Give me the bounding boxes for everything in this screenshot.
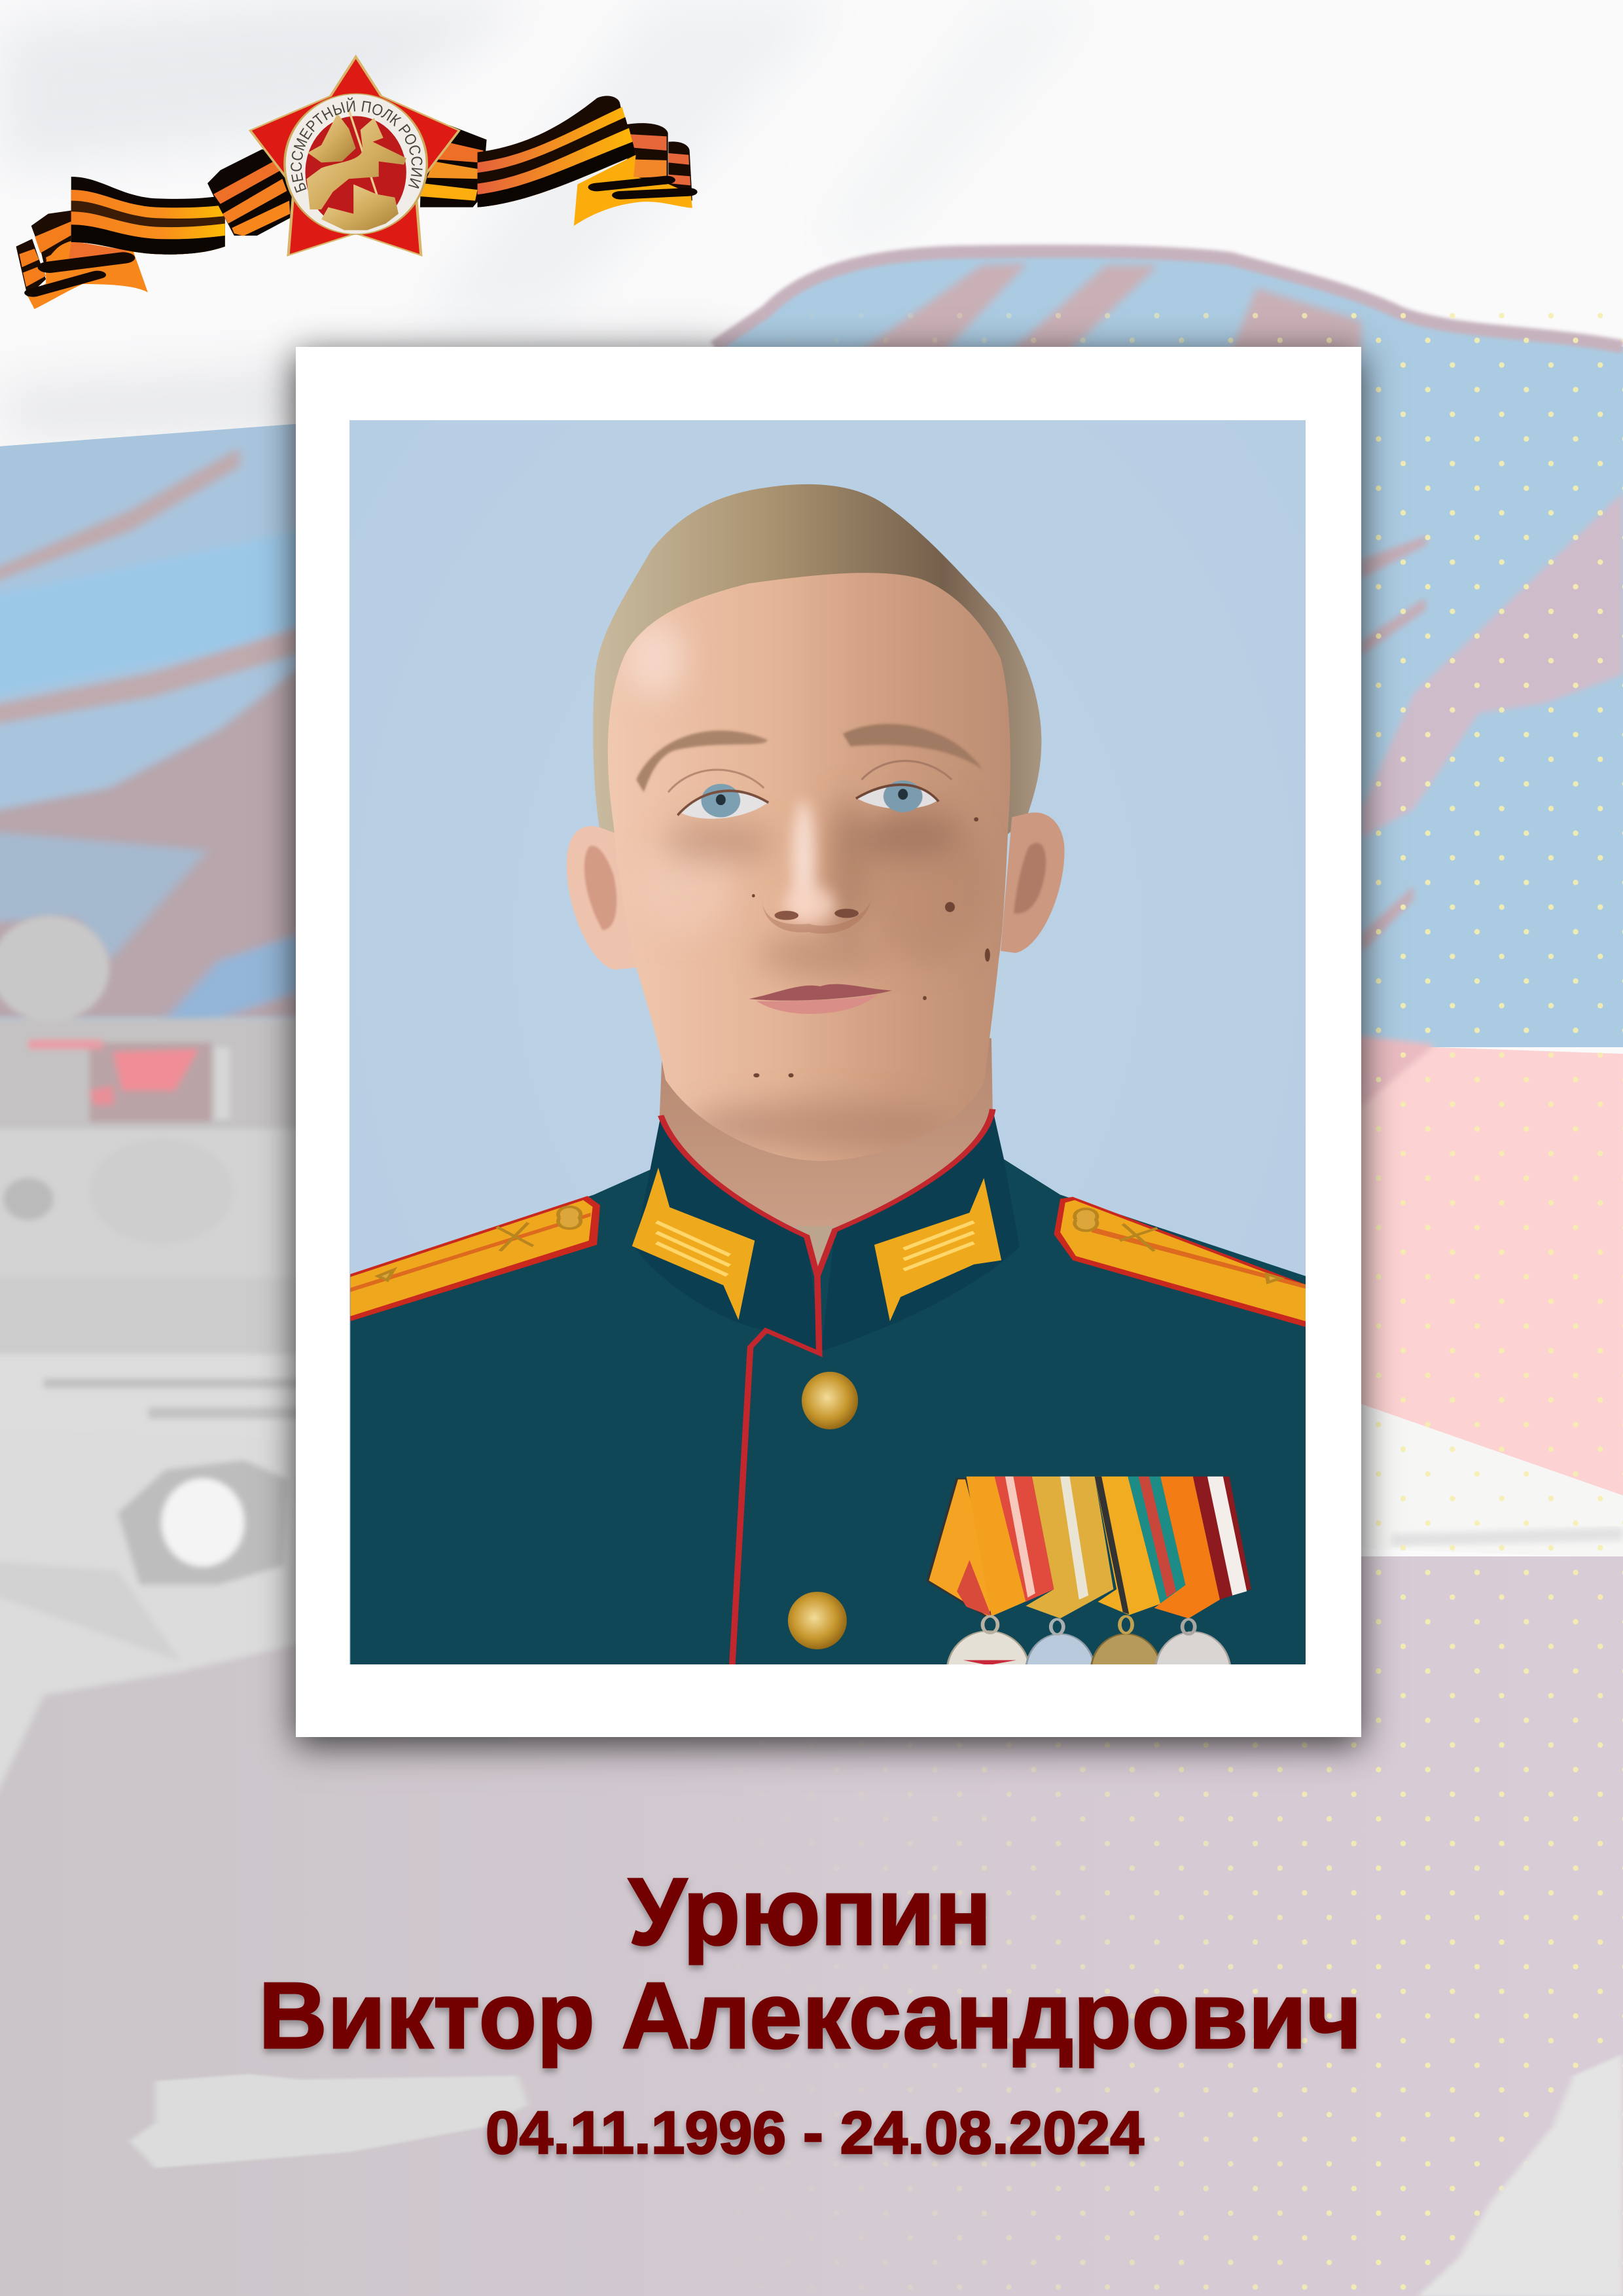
emblem: Immortal Regiment ribbon and star xyxy=(16,54,698,309)
nose xyxy=(762,901,871,934)
life dates: 04.11.1996 - 24.08.2024 xyxy=(486,2100,1144,2166)
face xyxy=(608,573,1010,1161)
turret dome xyxy=(0,916,109,1021)
right ribbon far folds xyxy=(597,123,692,201)
white patch lower right xyxy=(130,2054,1623,2296)
name and dates xyxy=(259,1858,1362,2166)
right collar tab xyxy=(874,1178,1001,1321)
white flag stripe folds xyxy=(0,0,1099,439)
right ribbon tail stripes xyxy=(597,180,688,195)
medal ribbons xyxy=(927,1477,1251,1619)
white flag stripe lower xyxy=(1348,1399,1623,1558)
left ribbon wave xyxy=(71,177,225,255)
headlamp xyxy=(162,1479,244,1567)
photo card frame xyxy=(296,347,1361,1737)
lips xyxy=(749,984,892,1014)
rider and cape xyxy=(308,113,356,162)
given name and patronymic: Виктор Александрович xyxy=(259,1963,1362,2068)
uniform and neck xyxy=(350,1038,1306,1712)
left collar tab xyxy=(632,1168,755,1320)
red flag stripe xyxy=(1348,1044,1623,1496)
right flag panel xyxy=(1348,492,1623,1558)
hair xyxy=(593,484,1041,834)
stone patch lower left xyxy=(130,2074,528,2168)
lower mauve field xyxy=(0,1556,1623,2296)
blue flag stripe, right xyxy=(714,251,1623,1047)
lower button xyxy=(788,1592,847,1649)
dragon xyxy=(321,185,399,230)
red star xyxy=(250,57,459,255)
polka dot overlay xyxy=(859,313,1623,2289)
moles xyxy=(752,817,990,1077)
neck xyxy=(660,1038,993,1227)
left eye xyxy=(668,770,768,819)
right ear xyxy=(1001,812,1065,953)
right ribbon tail xyxy=(574,155,692,226)
right epaulette xyxy=(1054,1197,1306,1327)
right ribbon rise xyxy=(478,96,636,207)
left eyebrow xyxy=(636,730,768,792)
portrait photo xyxy=(349,420,1306,1712)
red piping xyxy=(661,1109,993,1665)
medallion centre xyxy=(305,116,406,228)
upper button xyxy=(802,1372,858,1429)
horse body xyxy=(307,118,406,209)
tunic xyxy=(350,1109,1306,1665)
lance xyxy=(349,110,381,207)
facial shading xyxy=(625,621,990,1151)
collar xyxy=(635,1115,821,1352)
left flag and vehicle xyxy=(0,423,306,1806)
head xyxy=(567,484,1065,1161)
vehicle body xyxy=(0,916,306,1806)
left ribbon tail xyxy=(16,211,148,309)
medallion ring xyxy=(285,94,427,234)
left ear xyxy=(567,826,636,970)
right eyebrow xyxy=(843,724,982,769)
right ribbon near star xyxy=(420,126,487,207)
medallion inscription: БЕССМЕРТНЫЙ ПОЛК РОССИИ xyxy=(291,97,423,192)
medals xyxy=(947,1617,1230,1712)
surname: Урюпин xyxy=(628,1858,991,1965)
right eye xyxy=(856,761,952,812)
left epaulette xyxy=(350,1196,600,1321)
left ribbon fold xyxy=(207,149,294,236)
Saint George figure xyxy=(307,110,406,230)
